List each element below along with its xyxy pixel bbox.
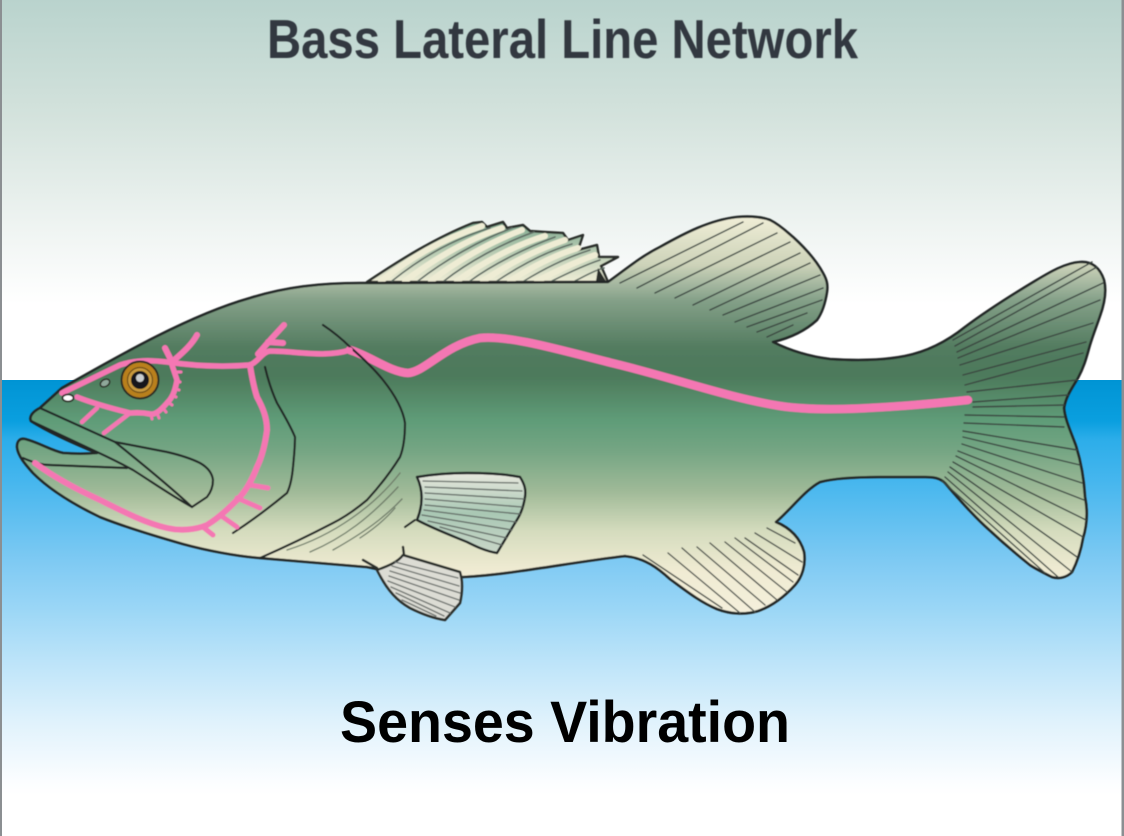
gill cover and jaw lines <box>23 325 405 558</box>
pink head canal network <box>35 325 350 535</box>
eye <box>122 362 158 398</box>
pectoral fin <box>405 473 525 553</box>
title: Bass Lateral Line Network <box>267 8 858 70</box>
gill ray strokes <box>287 473 402 552</box>
caption: Senses Vibration <box>340 690 790 755</box>
tail fin rays <box>942 262 1103 577</box>
spiny dorsal fin <box>367 222 618 282</box>
ventral fin <box>363 547 462 620</box>
pink lateral line <box>350 338 968 409</box>
anal fin rays <box>643 528 802 613</box>
nostrils <box>62 377 111 402</box>
fish illustration <box>17 217 1105 620</box>
fish body with soft dorsal, tail and anal fins <box>17 217 1105 613</box>
soft dorsal fin rays <box>620 222 823 337</box>
